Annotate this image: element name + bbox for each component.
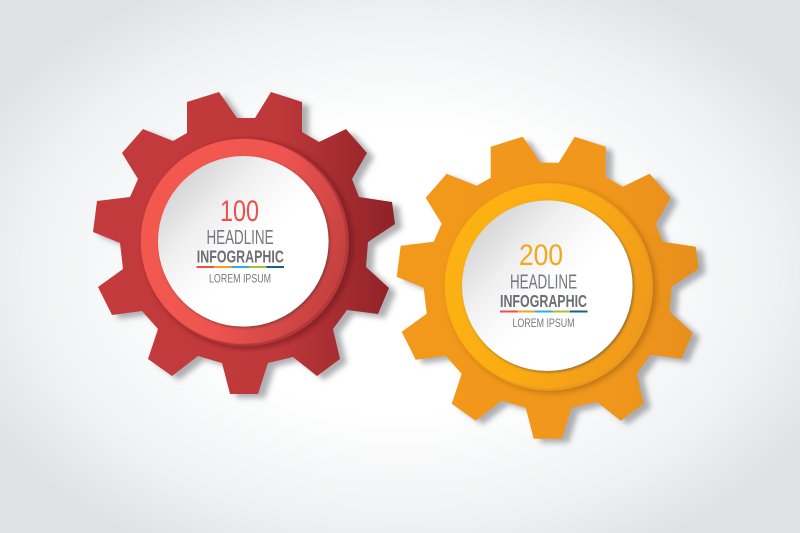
ring: red — [141, 139, 346, 344]
ring: orange — [445, 183, 650, 388]
ring band: orange — [445, 183, 653, 391]
gear shadow: orange — [404, 141, 706, 443]
ring shadow: orange — [448, 185, 656, 393]
colour bar — [196, 266, 284, 268]
disc shadow: red — [159, 157, 330, 328]
label: 100: 100 — [220, 195, 259, 228]
white disc: orange gear — [462, 200, 633, 371]
gear body: orange — [397, 137, 699, 439]
gear body: red — [93, 92, 395, 394]
red gear — [93, 92, 402, 398]
white disc: red gear — [158, 156, 329, 327]
label: infographic: INFOGRAPHIC — [197, 247, 284, 267]
gear shadow: red — [100, 96, 402, 398]
label: lorem ipsum: LOREM IPSUM — [512, 316, 574, 330]
label: 200: 200 — [519, 239, 563, 272]
colour bar — [500, 310, 588, 312]
label: headline: HEADLINE — [206, 227, 274, 249]
ring band: red — [141, 138, 349, 346]
ring shadow: red — [144, 140, 352, 348]
label: headline: HEADLINE — [510, 272, 577, 294]
orange gear — [397, 137, 706, 443]
label: infographic: INFOGRAPHIC — [500, 291, 587, 311]
disc shadow: orange — [463, 202, 634, 372]
label: lorem ipsum: LOREM IPSUM — [209, 272, 271, 286]
